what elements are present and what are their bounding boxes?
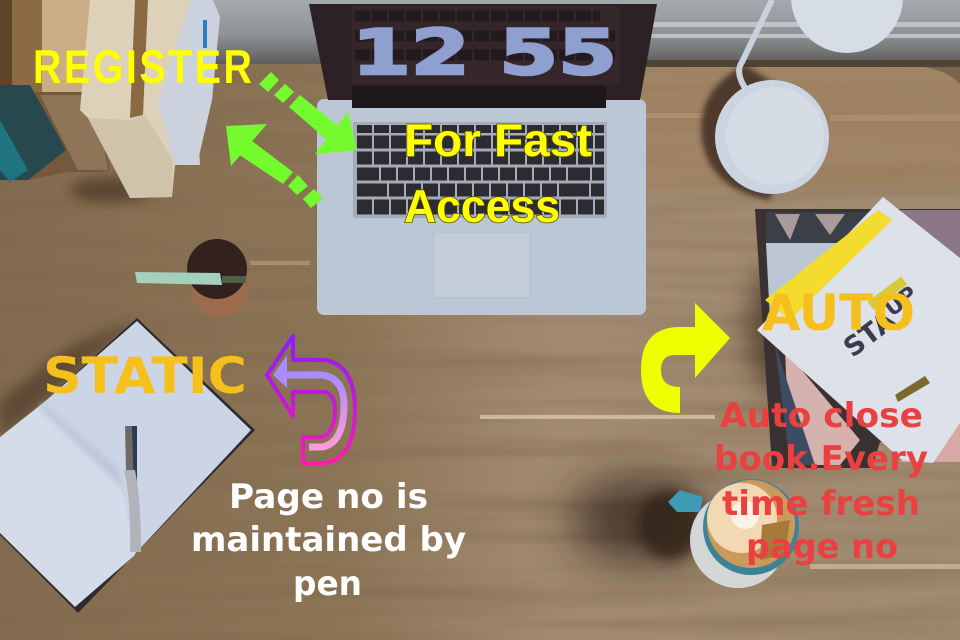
auto description: time fresh [722, 484, 920, 524]
lamp shade [791, 0, 903, 53]
green dashed arrow to laptop [259, 72, 357, 154]
books stack [0, 0, 220, 202]
pen cup body [190, 257, 250, 317]
cup shadow [570, 478, 710, 562]
coffee [707, 480, 795, 568]
mint pen [135, 272, 222, 285]
small pen cup [135, 239, 250, 317]
magazine stack [755, 209, 960, 468]
static description: maintained by [191, 520, 466, 560]
for fast access label: Access [404, 180, 560, 232]
lamp stem [739, 0, 772, 88]
for fast access label: For Fast [404, 114, 592, 166]
coffee cup [570, 478, 799, 588]
open notebook [0, 318, 255, 613]
right page [43, 321, 251, 555]
book title [831, 275, 929, 364]
left page [0, 403, 135, 607]
yellow book band [765, 210, 892, 320]
register heading: REGISTER [33, 42, 254, 94]
auto description: page no [746, 527, 898, 567]
lamp base [715, 80, 829, 194]
static description [191, 477, 466, 604]
purple return arrow [267, 336, 355, 463]
notebook pen [124, 426, 141, 552]
notebook cover edge [0, 318, 255, 613]
cup rim [703, 479, 799, 575]
magazines and startup book [748, 197, 960, 468]
book title: STA [838, 305, 902, 364]
auto description: Auto close [720, 396, 923, 436]
static description: pen [293, 564, 362, 604]
book cover [757, 197, 960, 463]
trackpad [433, 232, 530, 298]
laptop [309, 4, 657, 315]
auto description: book.Every [714, 439, 928, 479]
auto description [714, 396, 928, 567]
static description: Page no is [229, 477, 428, 517]
lamp shadow [701, 65, 800, 200]
keyboard [353, 122, 607, 218]
cup handle [668, 490, 703, 512]
static heading: STATIC [43, 347, 247, 405]
saucer [690, 492, 786, 588]
laptop body [317, 99, 646, 315]
auto heading: AUTO [762, 284, 915, 342]
green dashed arrow to books [226, 124, 323, 208]
book title: UP [880, 282, 923, 322]
clock digits on the screen: 12 55 [352, 16, 617, 89]
laptop screen [309, 4, 657, 100]
yellow curved arrow [641, 303, 730, 413]
for fast access label [404, 114, 592, 232]
pen cup opening [187, 239, 247, 299]
wall behind desk [210, 0, 960, 187]
desk lamp [701, 0, 903, 200]
